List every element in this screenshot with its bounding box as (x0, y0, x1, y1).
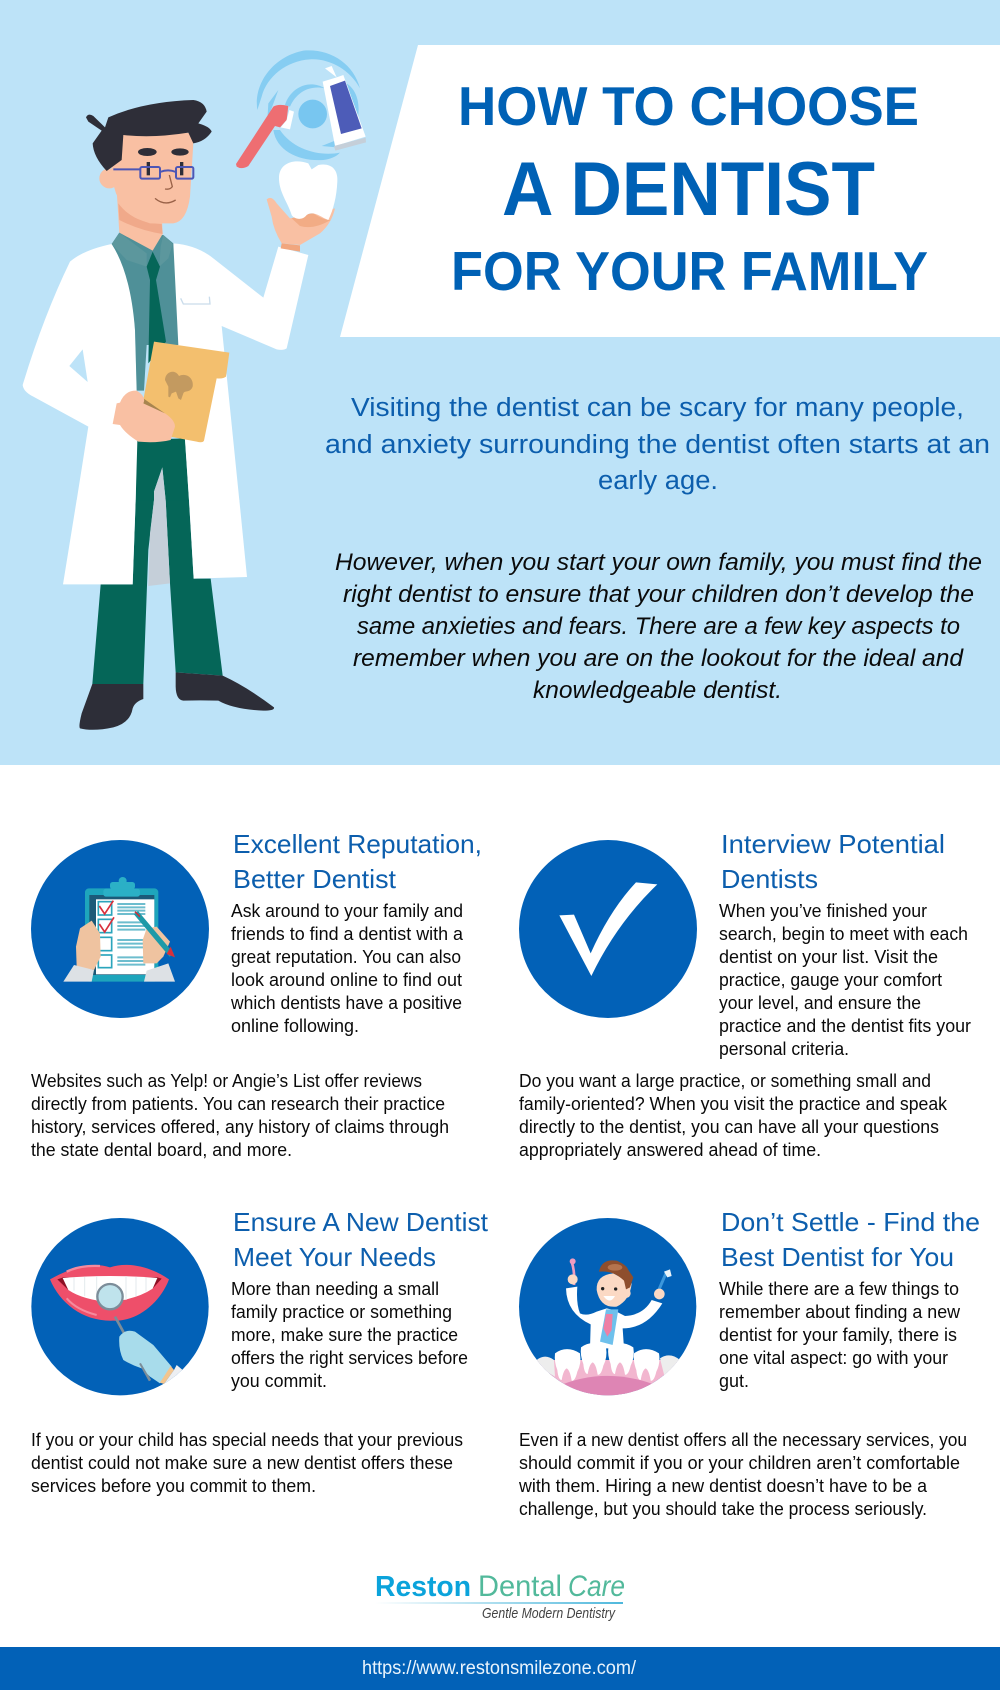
logo: Dental (478, 1570, 562, 1603)
heading (721, 829, 945, 894)
intro text (325, 394, 990, 495)
lower paragraph: should commit if you or your children aren’t comfortable (519, 1453, 960, 1473)
lower paragraph: family-oriented? When you visit the practice and speak (519, 1094, 948, 1114)
icon: smile with dental mirror (31, 1218, 209, 1395)
body text (719, 901, 971, 1059)
shirt (112, 233, 178, 391)
title (451, 76, 928, 302)
lower paragraph: directly to the dentist, you can have all your questions (519, 1117, 939, 1137)
body text (230, 901, 464, 1036)
intro text: and anxiety surrounding the dentist often starts at an (325, 431, 990, 459)
body text: friends to find a dentist with a (231, 924, 464, 944)
heading: Excellent Reputation, (233, 829, 482, 859)
intro text: early age. (598, 467, 718, 495)
lower paragraph: Do you want a large practice, or something small and (519, 1071, 931, 1091)
lower body: trousers, coat tails, shoes (63, 500, 274, 730)
toothpaste tube (323, 66, 366, 151)
italic paragraph: right dentist to ensure that your children don’t develop the (343, 581, 974, 608)
body text: your level, and ensure the (719, 993, 921, 1013)
glasses (113, 167, 193, 179)
toothbrush (236, 105, 294, 168)
body text: remember about finding a new (719, 1302, 961, 1322)
heading: Ensure A New Dentist (233, 1207, 489, 1237)
body text: look around online to find out (231, 970, 462, 990)
italic paragraph: However, when you start your own family, you must find the (335, 549, 982, 576)
heading: Don’t Settle - Find the (721, 1207, 980, 1237)
section 2: interview potential dentists (519, 829, 971, 1160)
heading: Better Dentist (233, 864, 397, 894)
body text: practice and the dentist fits your (719, 1016, 971, 1036)
italic paragraph (335, 549, 982, 704)
icon: check mark (519, 840, 697, 1018)
hand (113, 391, 175, 442)
folder (143, 342, 229, 442)
title: A DENTIST (502, 147, 875, 232)
heading: Dentists (721, 864, 818, 894)
logo: Gentle Modern Dentistry (482, 1606, 616, 1622)
logo: Care (568, 1570, 625, 1603)
body text: While there are a few things to (719, 1279, 959, 1299)
body text: gut. (719, 1371, 749, 1391)
section 3: ensure a new dentist meets your needs (31, 1207, 489, 1496)
row of teeth (537, 1343, 680, 1381)
body text: search, begin to meet with each (719, 924, 968, 944)
body text: family practice or something (231, 1302, 452, 1322)
hair (86, 100, 212, 171)
heading: Meet Your Needs (233, 1242, 436, 1272)
icon: clipboard (31, 840, 209, 1018)
body text (719, 1279, 961, 1391)
italic paragraph: same anxieties and fears. There are a few key aspects to (357, 613, 960, 640)
head, hair, glasses and dental items (86, 50, 366, 252)
intro text: Visiting the dentist can be scary for many people, (351, 394, 964, 422)
body text: dentist on your list. Visit the (719, 947, 938, 967)
trouser top (136, 438, 189, 500)
lower paragraph: Websites such as Yelp! or Angie’s List offer reviews (31, 1071, 422, 1091)
lower paragraph: services before you commit to them. (31, 1476, 316, 1496)
body text: Ask around to your family and (231, 901, 463, 921)
tooth (279, 161, 337, 220)
logo: Reston (375, 1571, 471, 1603)
icon: cartoon dentist behind teeth (519, 1218, 696, 1396)
lower paragraph: If you or your child has special needs that your previous (31, 1430, 463, 1450)
lower paragraph (519, 1071, 948, 1160)
heading (233, 829, 482, 894)
neck and face (99, 133, 194, 251)
body text: great reputation. You can also (231, 947, 461, 967)
gums (537, 1360, 678, 1396)
lower paragraph: with them. Hiring a new dentist doesn’t have to be a (518, 1476, 928, 1496)
lower paragraph (31, 1071, 449, 1160)
body text: More than needing a small (231, 1279, 439, 1299)
upper body: coat, shirt, tie, folder, hand (23, 233, 308, 500)
heading (721, 1207, 980, 1272)
body text: offers the right services before (231, 1348, 468, 1368)
footer bar (0, 1647, 1000, 1690)
lower paragraph: directly from patients. You can research their practice (31, 1094, 445, 1114)
heading: Best Dentist for You (721, 1242, 954, 1272)
lower paragraph: challenge, but you should take the process seriously. (519, 1499, 927, 1519)
title banner (340, 45, 1000, 337)
swirl (257, 50, 360, 160)
italic paragraph: remember when you are on the lookout for the ideal and (353, 645, 964, 672)
lower paragraph (31, 1430, 463, 1496)
header background (0, 0, 1000, 765)
body text: which dentists have a positive (230, 993, 462, 1013)
tie (147, 252, 166, 363)
logo (375, 1570, 625, 1622)
body text: practice, gauge your comfort (719, 970, 942, 990)
heading (233, 1207, 489, 1272)
lower paragraph: Even if a new dentist offers all the necessary services, you (519, 1430, 967, 1450)
raised hand (267, 198, 335, 252)
body text: online following. (231, 1016, 359, 1036)
lower paragraph: dentist could not make sure a new dentist offers these (31, 1453, 453, 1473)
illustration: dentist holding tooth (23, 50, 366, 730)
body text: one vital aspect: go with your (719, 1348, 948, 1368)
italic paragraph: knowledgeable dentist. (533, 677, 782, 704)
body text (231, 1279, 468, 1391)
title: FOR YOUR FAMILY (451, 241, 928, 302)
body text: When you’ve finished your (719, 901, 927, 921)
section 4: don't settle (513, 1207, 980, 1519)
lower paragraph: appropriately answered ahead of time. (519, 1140, 821, 1160)
lower paragraph (518, 1430, 967, 1519)
nose and smile (155, 175, 176, 203)
footer url: https://www.restonsmilezone.com/ (362, 1658, 637, 1679)
body text: dentist for your family, there is (719, 1325, 957, 1345)
title: HOW TO CHOOSE (458, 76, 919, 137)
body text: more, make sure the practice (231, 1325, 458, 1345)
lower paragraph: history, services offered, any history of claims through (31, 1117, 449, 1137)
body text: personal criteria. (719, 1039, 849, 1059)
lab coat (23, 244, 137, 500)
section 1: excellent reputation (31, 829, 482, 1160)
body text: you commit. (231, 1371, 327, 1391)
eyes and brows (138, 148, 189, 175)
lower paragraph: the state dental board, and more. (31, 1140, 292, 1160)
heading: Interview Potential (721, 829, 945, 859)
